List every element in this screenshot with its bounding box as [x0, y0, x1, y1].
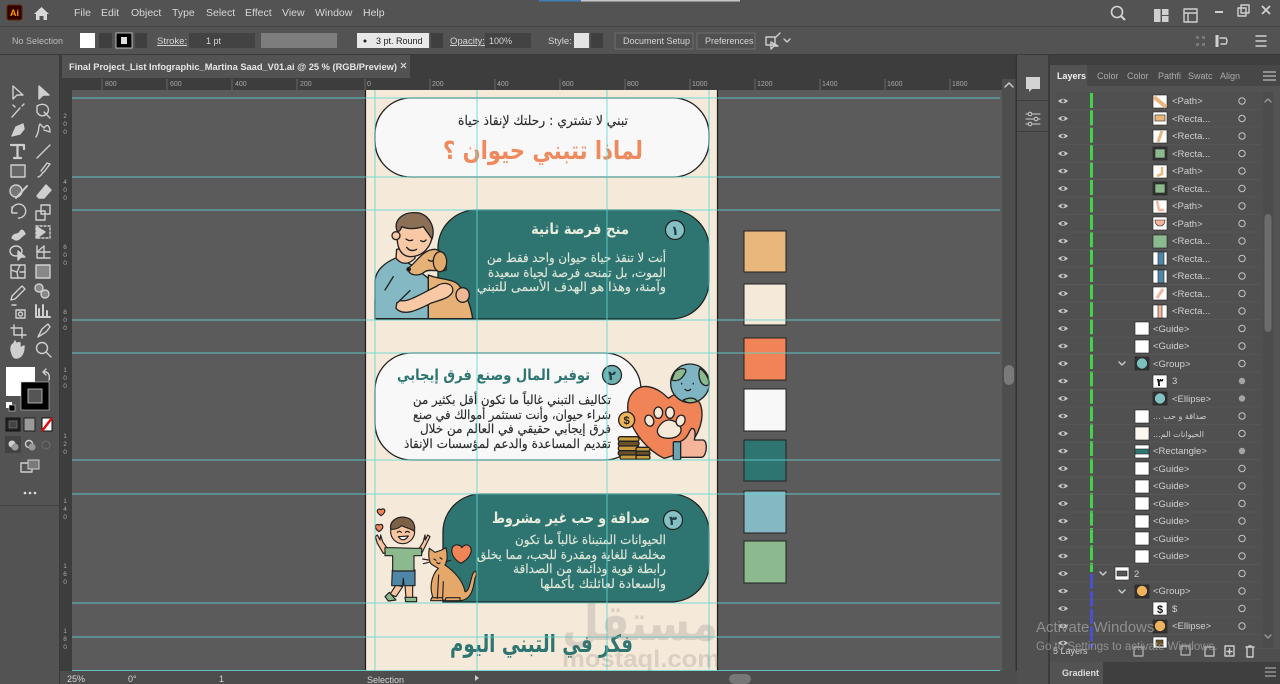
control bar [0, 27, 1280, 55]
number badge 3: ٣ [669, 514, 677, 529]
left ruler: 0 [63, 449, 67, 456]
body text [404, 390, 611, 452]
paw [657, 420, 681, 438]
left ruler: 0 [63, 260, 67, 267]
heading: توفير المال وصنع فرق إيجابي [397, 366, 590, 384]
layer rows: names: <Guide> [1153, 516, 1190, 527]
left ruler: 6 [63, 571, 67, 578]
layers panel tabs: Align [1220, 71, 1240, 81]
number badge 2 [602, 366, 622, 384]
tool panel [0, 55, 60, 684]
left ruler: 0 [63, 252, 67, 259]
left ruler: 0 [63, 317, 67, 324]
earth [671, 364, 709, 403]
layers panel tabs: Layers [1057, 71, 1086, 81]
body text: تقديم المساعدة والدعم لمؤسسات الإنقاذ [404, 436, 611, 452]
layer rows: names: <Path> [1172, 166, 1203, 177]
top ruler: 200 [300, 81, 312, 88]
canvas [72, 90, 1002, 671]
left ruler: 1 [63, 498, 67, 505]
panel scrollbar [1263, 92, 1273, 648]
left ruler: 2 [63, 441, 67, 448]
left ruler: 0 [63, 129, 67, 136]
layer rows: names: <Recta... [1172, 114, 1210, 125]
body text: تكاليف التبني غالباً ما تكون أقل بكثير من [413, 390, 611, 408]
watermark: مستقل [562, 594, 718, 652]
left ruler: 0 [63, 187, 67, 194]
activate windows notice: Activate Windows [1036, 619, 1154, 636]
layer rows: names: <Ellipse> [1172, 621, 1212, 632]
stacks [618, 437, 639, 441]
left ruler: 6 [63, 244, 67, 251]
watermark [562, 594, 720, 673]
top ruler: 400 [497, 81, 509, 88]
body text: مخلصة للغاية ومقدرة للحب، مما يخلق [477, 547, 666, 563]
layer rows: names: <Guide> [1153, 464, 1190, 475]
heading: صداقة و حب غير مشروط [492, 509, 650, 527]
number badge 3 [664, 510, 682, 530]
menu bar: Select [206, 7, 235, 19]
side icon dock [1017, 55, 1050, 684]
layers panel tabs: Swatc [1188, 71, 1213, 81]
layers panel tabs: Color [1097, 71, 1119, 81]
layer rows: names: ...الحيوانات الم [1153, 430, 1204, 439]
top ruler [60, 79, 1016, 90]
main title: لماذا تتبني حيوان ؟ [443, 136, 643, 166]
illustration: boy and cat with hearts [375, 509, 476, 602]
status bar: 0° [128, 674, 137, 684]
body text [477, 530, 666, 592]
layers panel footer: 5 Layers [1053, 646, 1088, 656]
layer rows: names [1134, 96, 1212, 632]
menu bar: Type [172, 7, 195, 19]
left ruler: 1 [63, 433, 67, 440]
layer rows: names: <Recta... [1172, 254, 1210, 265]
panel: reason 2 save money [375, 353, 641, 460]
menu bar: Ai [10, 8, 19, 18]
menu bar: File [74, 7, 91, 19]
left ruler: 1 [63, 563, 67, 570]
gradient panel [1050, 662, 1280, 684]
left ruler: 0 [63, 325, 67, 332]
layer rows: names: <Path> [1172, 219, 1203, 230]
top ruler: 600 [170, 81, 182, 88]
left ruler: 0 [63, 644, 67, 651]
body text: الحيوانات المتبناة غالباً ما تكون [515, 530, 666, 548]
status bar: 25% [67, 674, 85, 684]
layer rows: color bars [1056, 92, 1264, 648]
control bar: Stroke: [157, 36, 187, 47]
thumbnail glyphs: ٣ [1157, 376, 1164, 389]
illustration: man hugging dog [375, 213, 473, 319]
coin [619, 412, 635, 428]
layer rows: names: ... صداقة و حب [1153, 412, 1206, 421]
document tab strip: Final Project_List Infographic_Martina Saad_V01.ai @ 25 % (RGB/Preview) [69, 61, 397, 72]
menu bar: Help [363, 7, 385, 19]
control bar: Document Setup [623, 36, 690, 46]
activate windows notice [1036, 619, 1218, 653]
number badge 2: ٢ [608, 369, 616, 384]
top ruler: 1200 [757, 81, 773, 88]
layer rows: names: $ [1172, 604, 1178, 615]
left ruler: 8 [63, 309, 67, 316]
control bar: 100% [489, 36, 512, 46]
top ruler: 1800 [952, 81, 968, 88]
panel: intro title card [375, 98, 709, 177]
number badge 1 [666, 220, 684, 240]
layer rows: disclosure chevrons [1100, 362, 1125, 593]
layer rows: names: 3 [1172, 376, 1177, 387]
canvas scrollbars [1002, 55, 1017, 684]
body text: أنت لا تنقذ حياة حيوان واحد فقط من [487, 249, 666, 266]
gradient panel: Gradient [1062, 668, 1099, 678]
illustration: heart, earth, coins, thumb [618, 364, 709, 460]
menu bar: Object [131, 7, 161, 19]
left ruler: 4 [63, 506, 67, 513]
illustration: heart, earth, coins, thumb: $ [623, 415, 630, 427]
menu bar [0, 0, 1280, 27]
layers panel footer [1050, 646, 1280, 662]
top ruler: 1400 [822, 81, 838, 88]
left ruler: 0 [63, 514, 67, 521]
menu bar: Window [315, 7, 353, 19]
body text: شراء حيوان، وأنت تستثمر أموالك في صنع [413, 406, 611, 423]
top ruler: 1600 [887, 81, 903, 88]
left ruler: 1 [63, 367, 67, 374]
layer rows: names: <Recta... [1172, 149, 1210, 160]
layer rows: names: <Recta... [1172, 271, 1210, 282]
control bar: Opacity: [450, 36, 485, 47]
layer rows: target circles [1239, 98, 1245, 629]
left ruler: 0 [63, 375, 67, 382]
layer rows: eye icons [1058, 99, 1068, 645]
layer rows: names: <Group> [1153, 359, 1191, 370]
control bar: No Selection [12, 36, 63, 46]
layer rows: thumbnails [1115, 95, 1167, 648]
layer rows: names: <Recta... [1172, 289, 1210, 300]
layer rows: names: <Group> [1153, 586, 1191, 597]
left ruler [60, 79, 72, 671]
control bar: 1 pt [206, 36, 222, 46]
body text: رابطة قوية ودائمة من الصداقة [513, 561, 666, 577]
document tab strip [60, 55, 1017, 79]
left ruler: 0 [63, 121, 67, 128]
subtitle: تبني لا تشتري : رحلتك لإنقاذ حياة [458, 114, 628, 129]
panel: reason 3 friendship and love [443, 494, 709, 602]
layers panel [1050, 55, 1280, 684]
layer rows: names: <Rectangle> [1153, 446, 1207, 457]
guides [72, 90, 1000, 671]
thumbnail glyphs: $ [1157, 604, 1163, 616]
body text: الموت، بل تمنحه فرصة لحياة سعيدة [488, 265, 666, 281]
body text: فرق إيجابي حقيقي في العالم من خلال [420, 421, 611, 437]
layer rows: names: 2 [1134, 569, 1139, 580]
layer rows: names: <Guide> [1153, 481, 1190, 492]
body text: وآمنة، وهذا هو الهدف الأسمى للتبني [477, 279, 666, 295]
body text [477, 249, 666, 295]
layer rows: names: <Path> [1172, 201, 1203, 212]
menu bar: Effect [245, 7, 272, 19]
top ruler: 400 [235, 81, 247, 88]
number badge 1: ١ [671, 224, 679, 239]
left ruler: 0 [63, 195, 67, 202]
layers panel tabs: Pathfi [1158, 71, 1181, 81]
layer rows: names: <Recta... [1172, 131, 1210, 142]
watermark: mostaql.com [562, 646, 720, 673]
panel: reason 1 second chance [375, 210, 709, 319]
thumb [680, 428, 706, 457]
layer rows: names: <Guide> [1153, 324, 1190, 335]
layer rows: names: <Recta... [1172, 236, 1210, 247]
top ruler: 1000 [692, 81, 708, 88]
control bar: Style: [548, 36, 572, 47]
left ruler: 0 [63, 383, 67, 390]
left ruler: 1 [63, 628, 67, 635]
left ruler: 8 [63, 636, 67, 643]
top ruler: 800 [627, 81, 639, 88]
layer rows: names: <Guide> [1153, 551, 1190, 562]
left ruler: 0 [63, 579, 67, 586]
closing call to action: فكر في التبني اليوم [450, 630, 633, 658]
layer rows: names: <Path> [1172, 96, 1203, 107]
heading: منح فرصة ثانية [531, 220, 629, 238]
menu bar: Edit [101, 7, 119, 19]
layers panel tabs [1050, 65, 1280, 86]
thumbnail glyphs [1157, 376, 1164, 616]
artboard [365, 90, 718, 671]
top ruler: 600 [562, 81, 574, 88]
layer rows: names: <Guide> [1153, 534, 1190, 545]
layers panel tabs: Color [1127, 71, 1149, 81]
menu bar: View [282, 7, 305, 19]
top ruler: 200 [432, 81, 444, 88]
top ruler: 800 [105, 81, 117, 88]
status bar [60, 671, 1017, 684]
layer rows: names: <Guide> [1153, 499, 1190, 510]
status bar: 1 [219, 674, 224, 684]
color swatches [744, 231, 786, 583]
body text: والسعادة لعائلتك بأكملها [540, 575, 666, 592]
layer rows: names: <Recta... [1172, 184, 1210, 195]
control bar: Preferences [705, 36, 754, 46]
control bar: 3 pt. Round [376, 36, 423, 46]
left ruler: 4 [63, 179, 67, 186]
left ruler: 2 [63, 113, 67, 120]
activate windows notice: Go to Settings to activate Windows. [1036, 641, 1218, 653]
layer rows: names: <Ellipse> [1172, 394, 1212, 405]
layer rows: names: <Guide> [1153, 341, 1190, 352]
layer rows: names: <Recta... [1172, 306, 1210, 317]
top ruler: 0 [367, 81, 371, 88]
